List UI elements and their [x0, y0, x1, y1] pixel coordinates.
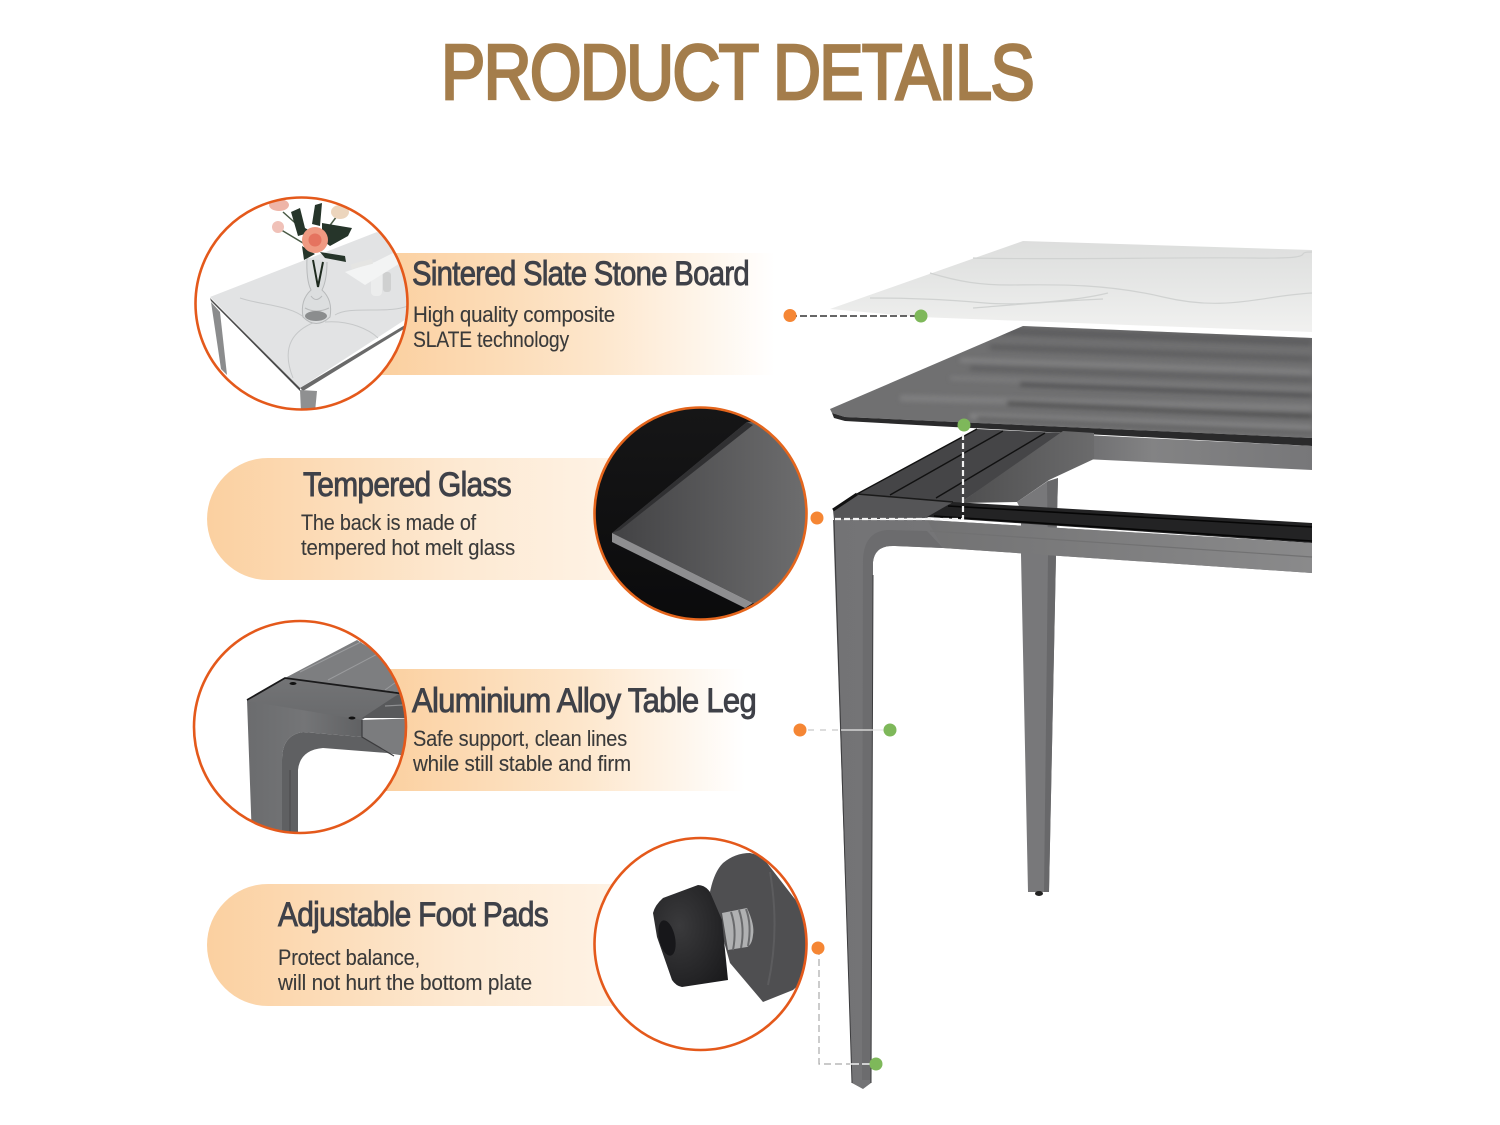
description: Safe support, clean lines [413, 726, 627, 751]
description [412, 726, 631, 776]
tempered glass panel [830, 326, 1312, 446]
rear leg [1017, 478, 1058, 896]
description [277, 945, 532, 995]
panel: tempered glass [207, 408, 820, 640]
description: SLATE technology [413, 327, 570, 352]
heading: Sintered Slate Stone Board [412, 255, 749, 293]
description [301, 510, 515, 560]
heading: Tempered Glass [303, 466, 511, 504]
heading: Adjustable Foot Pads [278, 896, 548, 934]
photo circle: foot pad [594, 838, 815, 1050]
description: while still stable and firm [412, 751, 631, 776]
text band [375, 253, 775, 375]
text band [207, 458, 625, 580]
heading: Aluminium Alloy Table Leg [412, 682, 756, 720]
description [413, 302, 615, 352]
front rail and leg [833, 494, 1312, 1089]
leader: aluminium leg [794, 724, 896, 736]
panel: adjustable foot pads [207, 838, 815, 1050]
panel: sintered slate stone board [196, 198, 775, 412]
table illustration [830, 241, 1312, 1089]
description: will not hurt the bottom plate [277, 970, 532, 995]
text band [207, 884, 625, 1006]
text band [375, 669, 745, 791]
bottle and tray [371, 274, 382, 296]
vase [302, 257, 331, 324]
photo circle: leg corner [194, 621, 420, 840]
sintered slate top slab [830, 241, 1312, 332]
description: High quality composite [413, 302, 615, 327]
rear apron and inner frame [857, 429, 1312, 503]
leader: foot pads [812, 942, 882, 1070]
description: The back is made of [301, 510, 477, 535]
flowers [282, 212, 336, 244]
panel: aluminium alloy table leg [194, 621, 756, 840]
description: tempered hot melt glass [301, 535, 515, 560]
photo circle: table top with vase [196, 198, 420, 412]
leader: tempered glass [810, 418, 970, 524]
leader: slate board [784, 309, 928, 322]
description: Protect balance, [278, 945, 420, 970]
photo circle: glass corner [593, 406, 808, 621]
title: PRODUCT DETAILS [441, 28, 1033, 116]
